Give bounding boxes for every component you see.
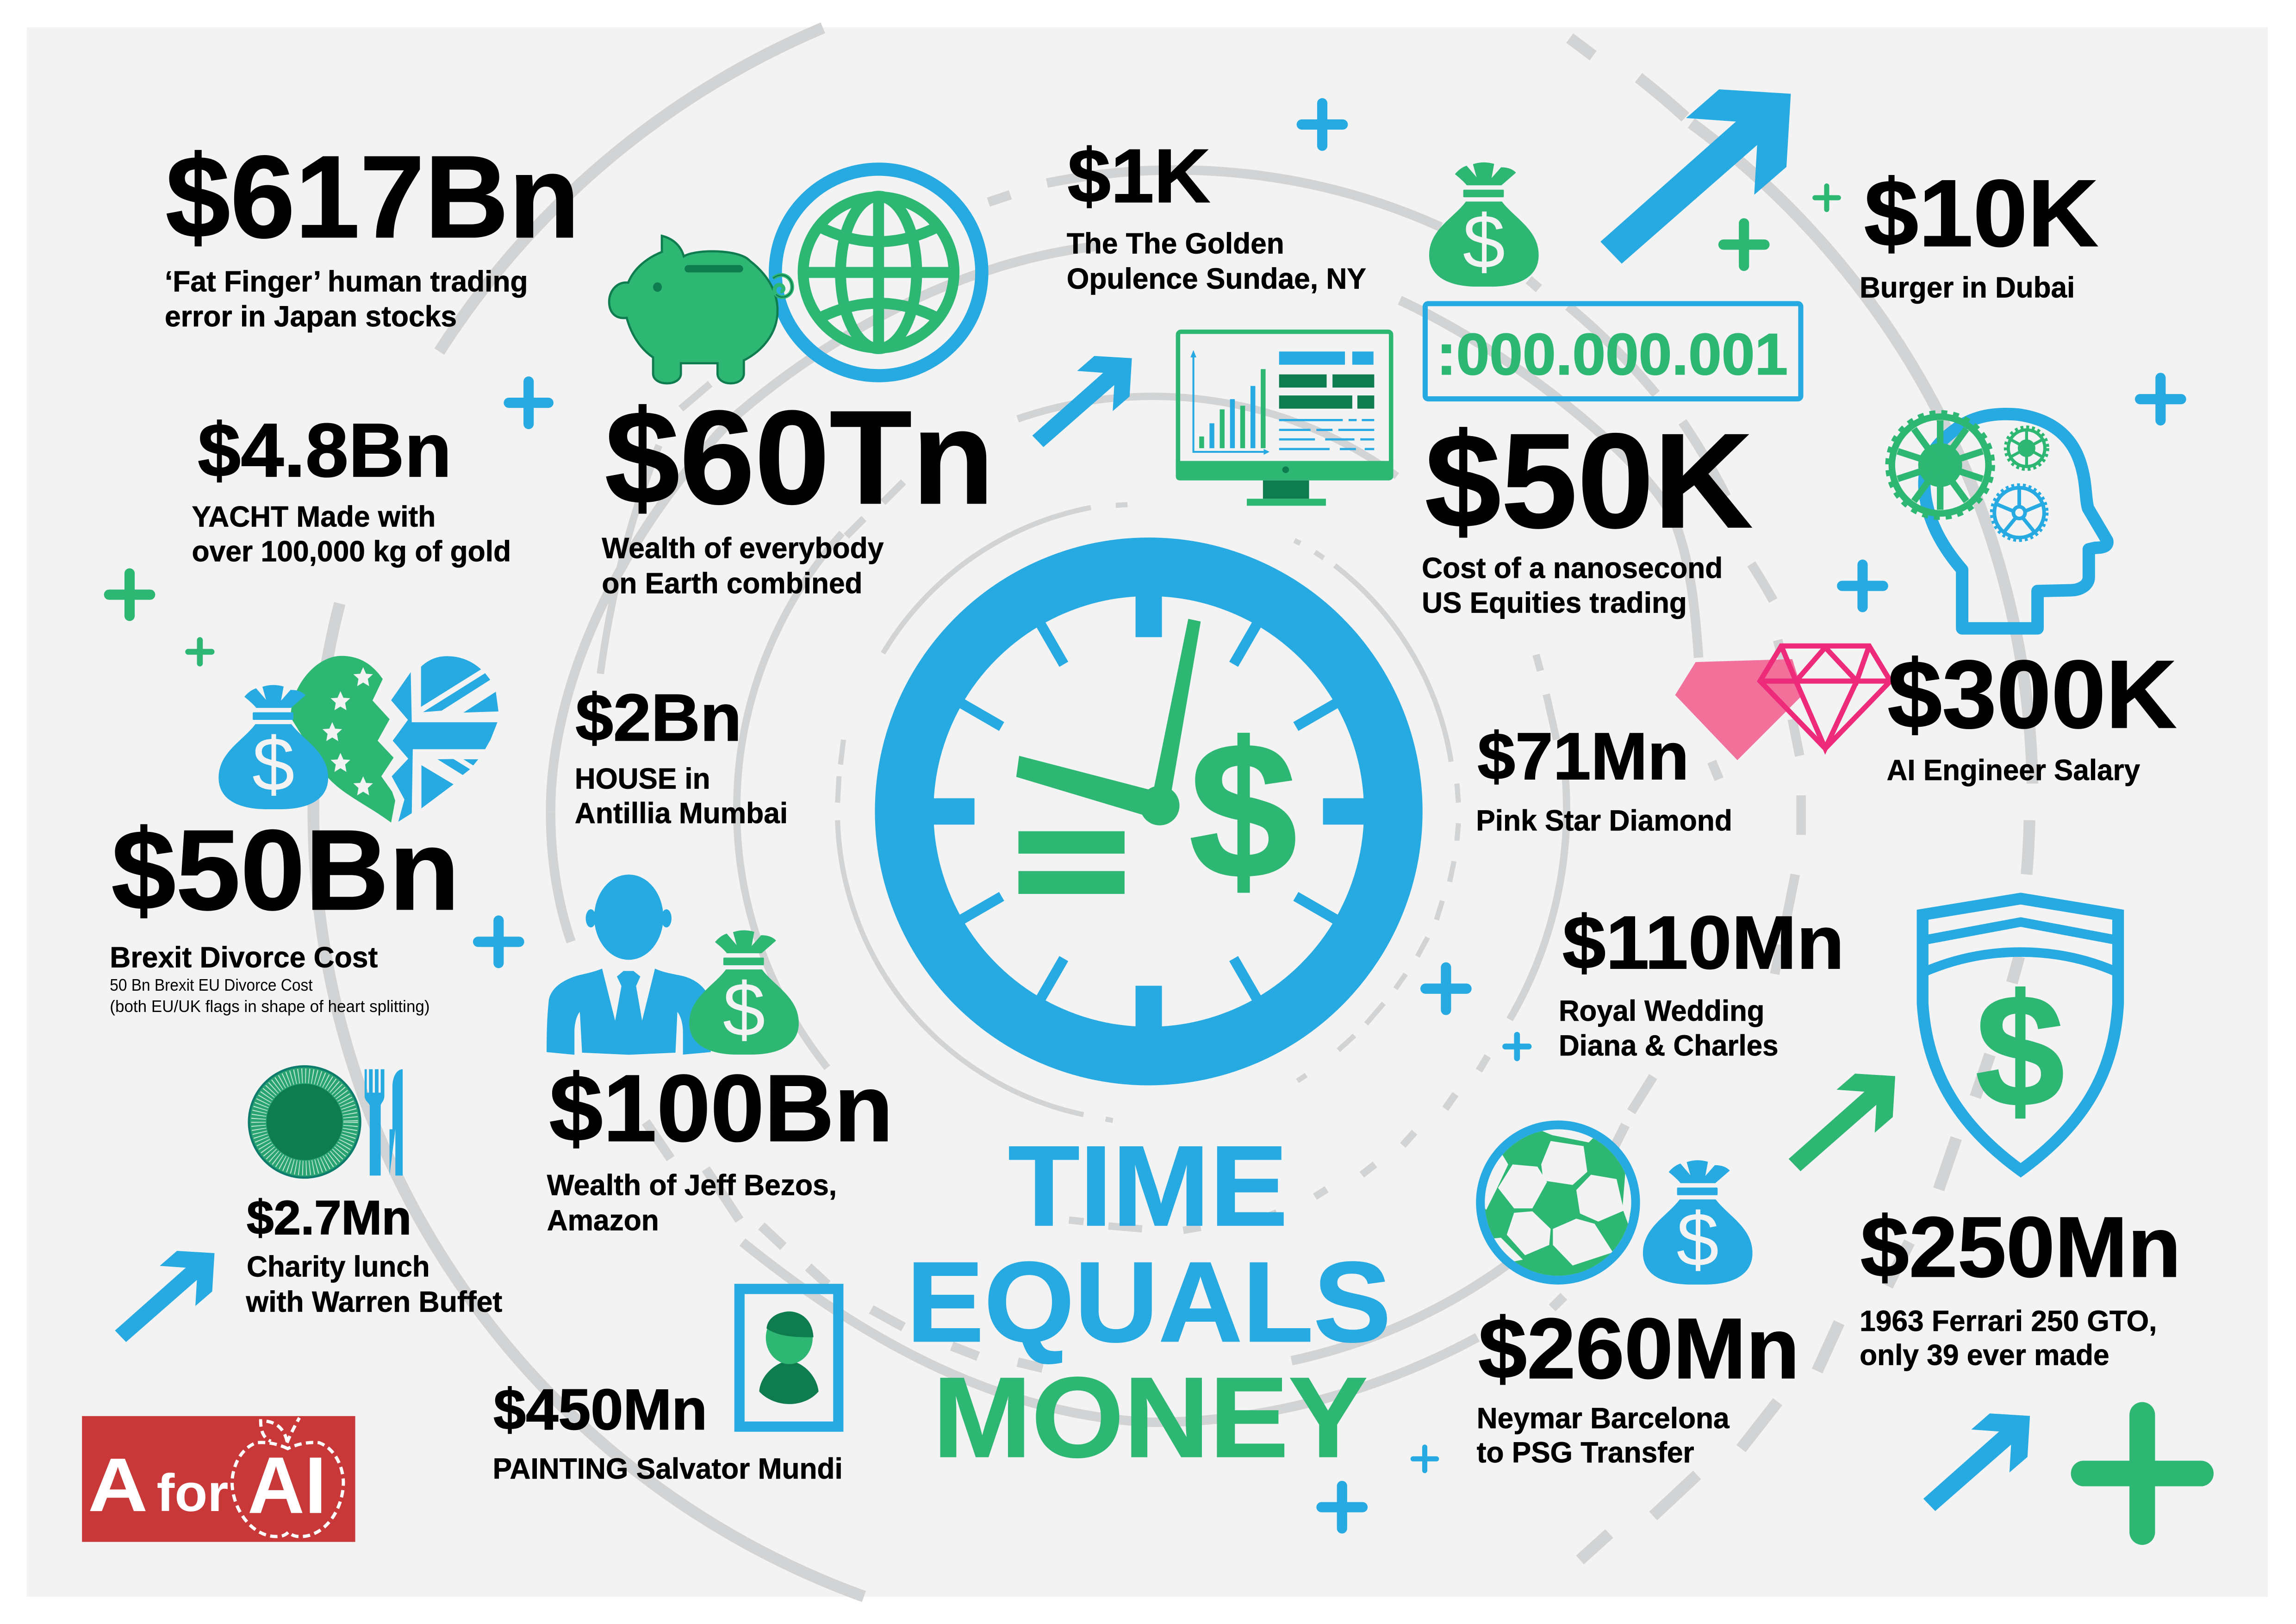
logo: A for AI: AI: [248, 1440, 327, 1530]
icon: money bag green: [1429, 162, 1539, 287]
fact: 4.8 billion: [192, 407, 511, 568]
fact: 100 billion: Wealth of Jeff Bezos,: [547, 1169, 837, 1202]
plus: small green left: [188, 640, 212, 663]
fact: 250 million: 1963 Ferrari 250 GTO,: [1860, 1305, 2157, 1337]
plus: blue right: [2140, 378, 2181, 420]
fact: 110 million: [1559, 901, 1844, 1062]
icon: money bag blue left: [218, 685, 328, 809]
fact: 60 trillion: Wealth of everybody: [602, 532, 884, 564]
equals sign: [1018, 831, 1125, 894]
fact: 71 million: Pink Star Diamond: [1476, 805, 1732, 837]
fact: 100 billion: Amazon: [547, 1205, 659, 1237]
heart half: EU: [291, 656, 395, 823]
fact: 300 thousand: $300K: [1887, 641, 2177, 749]
icon: businessman: [547, 874, 711, 1055]
plus: large green bottom right: [2084, 1415, 2201, 1532]
fact: 60 trillion: $60Tn: [605, 383, 994, 532]
plus: blue near head: [1842, 565, 1883, 607]
fact: 250 million: $250Mn: [1860, 1199, 2181, 1295]
fact: 250 million: only 39 ever made: [1860, 1339, 2109, 1372]
icon: head with gears: [1888, 413, 2107, 628]
fact: 50 billion: (both EU/UK flags in shape of heart splitting): [110, 997, 430, 1016]
fact: 260 million: to PSG Transfer: [1477, 1437, 1694, 1469]
fact: 1 thousand: The The Golden: [1067, 227, 1284, 260]
icon: money bag blue left: $: [252, 722, 294, 807]
icon: arrow up right, bottom: [1923, 1413, 2030, 1511]
icon: arrow up right, charity: [115, 1251, 214, 1342]
fact: 100 billion: $100Bn: [549, 1055, 893, 1162]
fact: 2.7 million: [246, 1191, 502, 1318]
fact: 2.7 million: with Warren Buffet: [246, 1286, 502, 1318]
logo: A for AI: for: [157, 1464, 229, 1523]
plus: small green top right: [1815, 186, 1838, 209]
icon: monitor with chart: [1176, 332, 1393, 506]
icon: portrait frame: [740, 1289, 838, 1427]
icon: football: [1477, 1125, 1636, 1280]
fact: 2 billion: Antillia Mumbai: [575, 797, 788, 830]
clock ring: [904, 567, 1393, 1056]
plus: small blue bottom: [1413, 1447, 1437, 1471]
plus: green top right: [1724, 223, 1764, 266]
plus: blue top: [1302, 103, 1343, 146]
clock hands: [1016, 619, 1201, 825]
concentric ring background: [313, 28, 2032, 1597]
fact: 617 billion: [165, 131, 580, 333]
fact: 50 thousand: [1422, 406, 1753, 619]
icon: large arrow up right: [1600, 89, 1791, 264]
clock ticks: [931, 593, 1367, 1030]
fact: 50 thousand: $50K: [1425, 406, 1753, 556]
fact: 60 trillion: on Earth combined: [602, 567, 863, 600]
counter box: :000.000.001: [1437, 321, 1788, 387]
icon: arrow up right, chart: [1033, 356, 1132, 447]
fact: 4.8 billion: $4.8Bn: [198, 407, 452, 493]
fact: 450 million: [493, 1378, 843, 1485]
plus: green left: [109, 574, 150, 616]
fact: 2.7 million: Charity lunch: [247, 1251, 430, 1283]
fact: 2 billion: [575, 681, 788, 830]
dollar sign: $: [1189, 702, 1297, 918]
icon: money bag green: $: [1463, 199, 1505, 284]
icon: pink diamond: [1675, 646, 1891, 760]
fact: 50 billion: Brexit Divorce Cost: [110, 942, 378, 974]
fact: 71 million: $71Mn: [1477, 719, 1689, 793]
fact: 60 trillion: [602, 383, 994, 600]
fact: 1 thousand: Opulence Sundae, NY: [1067, 262, 1366, 295]
fact: 4.8 billion: YACHT Made with: [192, 501, 436, 533]
logo: A for AI: [82, 1416, 355, 1542]
fact: 110 million: $110Mn: [1562, 901, 1844, 985]
heart half: UK: [391, 656, 498, 822]
fact: 260 million: [1477, 1301, 1799, 1469]
icon: piggy bank: [609, 236, 792, 383]
fact: 2 billion: HOUSE in: [575, 763, 710, 795]
clock: [904, 567, 1393, 1056]
icon: money bag green by man: [689, 931, 799, 1055]
fact: 71 million: [1476, 719, 1732, 837]
icon: globe: [775, 169, 982, 376]
fact: 1 thousand: $1K: [1067, 133, 1210, 219]
icon: plate with cutlery: [249, 1066, 403, 1178]
fact: 4.8 billion: over 100,000 kg of gold: [192, 536, 511, 568]
icon: split heart with EU and UK flags: [291, 656, 498, 823]
title: MONEY: [933, 1354, 1368, 1481]
fact: 450 million: $450Mn: [493, 1378, 707, 1442]
icon: shield with dollar: $: [1976, 962, 2064, 1140]
fact: 2.7 million: $2.7Mn: [247, 1191, 411, 1245]
icon: shield with dollar: [1923, 899, 2118, 1170]
counter box: [1425, 304, 1801, 399]
fact: 2 billion: $2Bn: [575, 681, 742, 755]
fact: 50 billion: [110, 806, 460, 1016]
fact: 300 thousand: AI Engineer Salary: [1887, 754, 2140, 787]
plus: blue by clock: [1425, 968, 1467, 1010]
fact: 50 thousand: Cost of a nanosecond: [1422, 552, 1723, 584]
icon: green arrow to shield: [1789, 1074, 1895, 1171]
fact: 617 billion: $617Bn: [166, 131, 580, 262]
icon: money bag blue by football: $: [1676, 1197, 1719, 1282]
fact: 50 billion: $50Bn: [111, 806, 460, 934]
title: EQUALS: [906, 1238, 1391, 1366]
plus: blue top left: [509, 381, 548, 424]
icon: money bag blue by football: [1643, 1160, 1753, 1285]
fact: 1 thousand: [1067, 133, 1366, 295]
plus: blue by fifty billion: [478, 921, 519, 963]
title: TIME: [1008, 1123, 1288, 1250]
logo: A for AI: A: [88, 1442, 148, 1527]
fact: 100 billion: [547, 1055, 893, 1237]
fact: 250 million: [1860, 1199, 2181, 1372]
fact: 110 million: Royal Wedding: [1559, 995, 1764, 1027]
title: [906, 1123, 1391, 1481]
fact: 450 million: PAINTING Salvator Mundi: [493, 1453, 843, 1485]
fact: 617 billion: ‘Fat Finger’ human trading: [165, 266, 528, 298]
plus: small blue by wedding: [1505, 1035, 1529, 1058]
fact: 50 billion: 50 Bn Brexit EU Divorce Cost: [110, 975, 312, 994]
plus: blue bottom: [1321, 1486, 1363, 1529]
fact: 50 thousand: US Equities trading: [1422, 587, 1687, 619]
fact: 617 billion: error in Japan stocks: [165, 300, 457, 333]
fact: 260 million: $260Mn: [1478, 1301, 1799, 1397]
icon: money bag green by man: $: [723, 967, 765, 1052]
fact: 10 thousand: $10K: [1864, 160, 2098, 267]
fact: 110 million: Diana & Charles: [1559, 1030, 1779, 1062]
fact: 10 thousand: Burger in Dubai: [1860, 271, 2075, 304]
fact: 260 million: Neymar Barcelona: [1477, 1402, 1730, 1435]
